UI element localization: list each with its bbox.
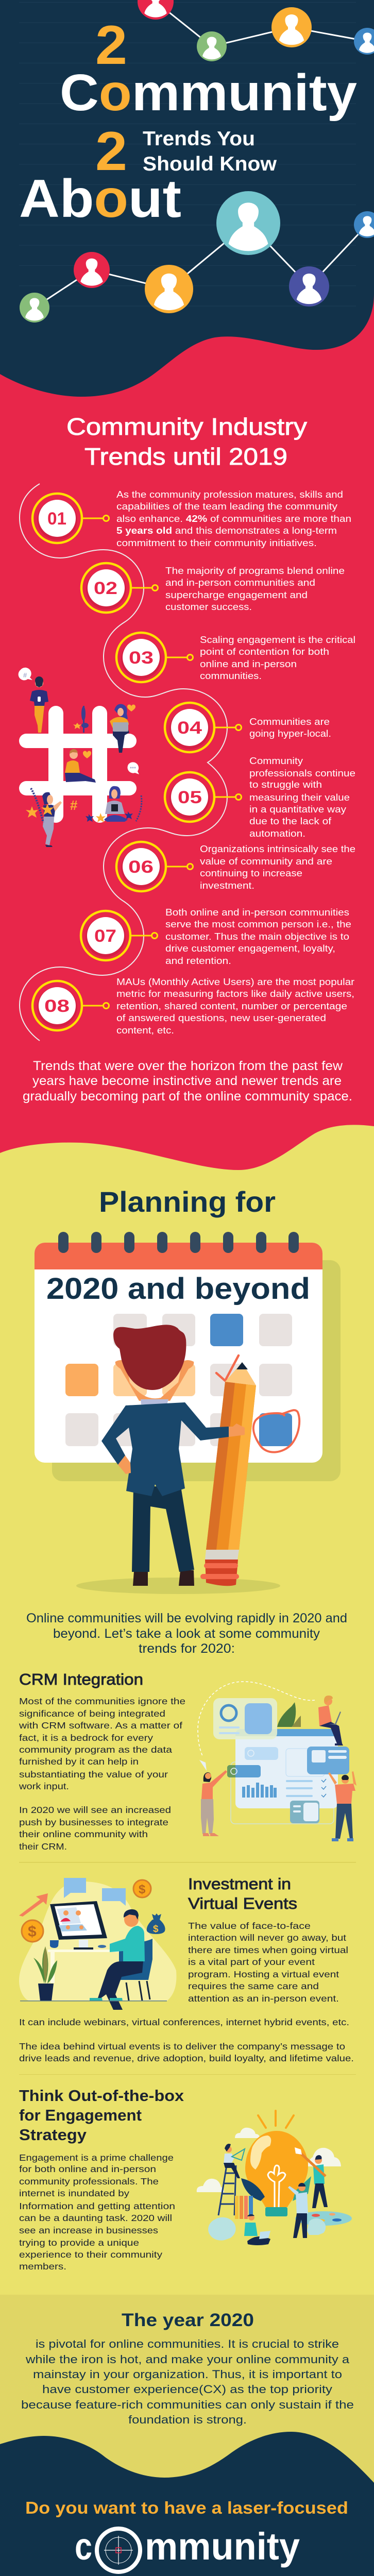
calendar xyxy=(35,1232,341,1481)
title xyxy=(19,14,357,229)
person: man with heart xyxy=(65,749,96,783)
engagement text: Engagement is a prime challenge xyxy=(19,2153,174,2163)
timeline path xyxy=(20,484,227,1041)
calendar heading: 2020 and beyond xyxy=(46,1272,310,1306)
trend 05: to struggle with xyxy=(249,779,322,790)
plant and cup xyxy=(33,1940,59,2001)
virtual events text: is a vital part of your event xyxy=(188,1957,315,1967)
trend 07: and retention. xyxy=(165,956,231,966)
heading: the year 2020: The year 2020 xyxy=(122,2310,254,2330)
closing paragraph of trends: Trends that were over the horizon from the past few xyxy=(33,1059,343,1073)
darker yellow band xyxy=(0,2295,374,2501)
neck and ears xyxy=(115,1360,194,1401)
CRM text: substantiating the value of your xyxy=(19,1769,168,1780)
trend 06: 06 xyxy=(128,857,154,877)
title: Trends You xyxy=(143,128,255,150)
trend 08: content, etc. xyxy=(116,1025,174,1036)
person: standing woman xyxy=(26,788,62,847)
icon: teal user xyxy=(216,191,280,255)
person: man standing xyxy=(288,2183,308,2238)
network graphic: top xyxy=(138,0,374,61)
ground shadow xyxy=(76,1578,280,1594)
pencil xyxy=(200,1362,256,1586)
trend 07: Both online and in-person communities xyxy=(165,907,349,918)
heading: planning for: Planning for xyxy=(99,1185,276,1218)
bulb xyxy=(245,2131,308,2207)
person: seated man xyxy=(244,2214,270,2245)
trend 08: 08 xyxy=(44,996,70,1016)
CRM text xyxy=(19,1696,185,1852)
closing paragraph of trends: gradually becoming part of the online community space. xyxy=(23,1089,352,1104)
collar xyxy=(141,1399,168,1404)
intro paragraph xyxy=(26,1611,347,1656)
virtual events wide text: drive leads and revenue, drive adoption, build loyalty, and lifetime value. xyxy=(19,2053,354,2063)
title: Should Know xyxy=(143,153,277,175)
trend 06: investment. xyxy=(200,880,254,891)
person: meditating woman xyxy=(86,786,142,822)
trend 06: continuing to increase xyxy=(200,868,302,878)
icon: orange hash: # xyxy=(70,798,78,813)
trend 06: Organizations intrinsically see the xyxy=(200,844,355,854)
closing paragraph of trends: years have become instinctive and newer trends are xyxy=(32,1074,342,1088)
virtual events text: The value of face-to-face xyxy=(188,1921,311,1931)
CRM text: fact, it is a bedrock for every xyxy=(19,1733,153,1743)
money bag xyxy=(147,1913,165,1935)
year 2020 paragraph: because feature-rich communities can only sustain if the xyxy=(21,2398,354,2411)
CRM text: In 2020 we will see an increased xyxy=(19,1805,171,1815)
trend 04 xyxy=(165,703,331,752)
pencils xyxy=(235,2196,253,2219)
trend 02 xyxy=(81,563,345,613)
intro paragraph: beyond. Let’s take a look at some community xyxy=(53,1626,320,1641)
virtual events wide text: The idea behind virtual events is to deliver the company’s message to xyxy=(19,2041,345,2052)
virtual events text: interaction will never go away, but xyxy=(188,1933,346,1943)
icon: blue user xyxy=(354,211,374,238)
icon: check mark xyxy=(216,1355,239,1381)
engagement text: members. xyxy=(19,2261,66,2272)
monitor with video call xyxy=(50,1901,107,1950)
trend 08: retention, shared content, number or percentage xyxy=(116,1001,347,1011)
heading: think out of the box xyxy=(19,2087,184,2144)
CRM text: community program as the data xyxy=(19,1744,172,1755)
heading: think out of the box: Think Out-of-the-box xyxy=(19,2087,184,2105)
leaves xyxy=(241,2178,265,2201)
virtual events text: program. Hosting a virtual event xyxy=(188,1969,339,1979)
calendar page xyxy=(35,1243,322,1463)
trend 06 xyxy=(116,842,355,891)
virtual events wide text: It can include webinars, virtual conferences, internet hybrid events, etc. xyxy=(19,2017,349,2027)
trend 05 xyxy=(165,756,355,839)
trend 05: 05 xyxy=(178,788,202,807)
trend 08: of answered questions, new user-generated xyxy=(116,1013,326,1023)
icon: orange user xyxy=(145,265,193,313)
CRM text: with CRM software. As a matter of xyxy=(19,1720,182,1731)
coins: $ xyxy=(139,1883,146,1896)
title: Community xyxy=(60,64,357,122)
trend 02: and in-person communities and xyxy=(165,578,315,588)
virtual events text: there are times when going virtual xyxy=(188,1945,348,1955)
coins: $ xyxy=(28,1923,37,1940)
trend 02: 02 xyxy=(94,579,117,598)
CRM text: significance of being integrated xyxy=(19,1708,165,1719)
person: man on laptop xyxy=(318,1696,343,1745)
trend 05: measuring their value xyxy=(249,792,350,803)
CRM text: their online community with xyxy=(19,1829,148,1839)
shoes xyxy=(133,1570,194,1586)
trend 02: The majority of programs blend online xyxy=(165,566,345,576)
year 2020 paragraph: is pivotal for online communities. It is crucial to strike xyxy=(36,2337,339,2350)
year 2020 paragraph: foundation is strong. xyxy=(128,2413,247,2426)
heading: community industry trends xyxy=(66,413,307,470)
community logotype with target: c xyxy=(75,2525,92,2568)
trend 03: Scaling engagement is the critical xyxy=(200,635,355,645)
calendar shadow xyxy=(52,1260,341,1481)
trend 08: MAUs (Monthly Active Users) are the most popular xyxy=(116,977,354,987)
person: man at desk xyxy=(90,1909,152,2010)
engagement text: see an increase in businesses xyxy=(19,2225,158,2235)
paint palette xyxy=(295,2211,352,2226)
jacket xyxy=(101,1402,229,1496)
trend 05: automation. xyxy=(249,828,305,839)
intro paragraph: Online communities will be evolving rapidly in 2020 and xyxy=(26,1611,347,1625)
virtual events text xyxy=(188,1921,348,2004)
speech bubble xyxy=(127,762,139,774)
title: 2 xyxy=(95,120,127,182)
coins xyxy=(22,1880,151,1942)
trend 01: capabilities of the team leading the community xyxy=(116,501,337,512)
heading: community industry trends: Trends until 2019 xyxy=(84,443,287,470)
call to action heading xyxy=(25,2498,348,2576)
rays xyxy=(258,2111,294,2128)
trend 07: drive customer engagement, loyalty, xyxy=(165,943,335,954)
engagement text: for both online and in-person xyxy=(19,2164,156,2174)
icon: circled date xyxy=(253,1410,299,1452)
icon: orange user xyxy=(271,7,312,47)
engagement text: Information and getting attention xyxy=(19,2201,175,2211)
trend 04: going hyper-local. xyxy=(249,728,331,739)
yellow section background xyxy=(0,1125,374,2318)
trend 03: online and in-person xyxy=(200,659,297,669)
trend 05: professionals continue xyxy=(249,768,355,778)
icon: green user xyxy=(197,31,227,61)
trend 05: due to the lack of xyxy=(249,816,332,826)
heading: investment in virtual events xyxy=(188,1875,297,1912)
trend 07: 07 xyxy=(94,926,116,946)
person: man with phone xyxy=(19,668,48,733)
title: 2 xyxy=(95,14,127,76)
hands xyxy=(118,1423,245,1474)
arrow xyxy=(19,1893,48,1917)
divider xyxy=(19,1862,356,1863)
trend 04: Communities are xyxy=(249,717,330,727)
heading: think out of the box: Strategy xyxy=(19,2126,87,2144)
trend 07: serve the most common person i.e., the xyxy=(165,919,351,929)
virtual events text: requires the same care and xyxy=(188,1981,319,1991)
small bulbs xyxy=(208,2217,326,2241)
heading: think out of the box: for Engagement xyxy=(19,2106,142,2124)
trend 03 xyxy=(116,633,355,682)
engagement text: internet is inundated by xyxy=(19,2188,129,2198)
network graphic: bottom xyxy=(20,191,374,323)
plant on hash xyxy=(73,706,89,733)
trend 05: Community xyxy=(249,756,303,766)
icon: green user xyxy=(20,293,49,323)
trend 08: metric for measuring factors like daily active users, xyxy=(116,989,354,999)
calendar rings xyxy=(58,1232,299,1253)
trend 07: customer. Thus the main objective is to xyxy=(165,931,349,942)
trend 06: value of community and are xyxy=(200,856,332,867)
CRM illustration xyxy=(198,1682,356,1841)
trend 01: As the community profession matures, skills and xyxy=(116,489,343,500)
engagement text xyxy=(19,2153,175,2272)
closing paragraph of trends xyxy=(23,1059,352,1104)
icon: indigo user xyxy=(289,266,329,307)
desk xyxy=(48,1950,123,1952)
hash symbol xyxy=(19,706,137,823)
heading: community industry trends: Community Industry xyxy=(66,413,307,440)
trend 02: customer success. xyxy=(165,602,252,612)
CRM text: push by businesses to integrate xyxy=(19,1817,168,1827)
engagement text: trying to provide a unique xyxy=(19,2238,139,2248)
divider xyxy=(19,2074,356,2075)
CRM text: Most of the communities ignore the xyxy=(19,1696,185,1706)
icon: red user xyxy=(74,252,110,288)
trend 01: 5 years old and this demonstrates a long-term xyxy=(116,526,337,536)
trend 01: also enhance. 42% of communities are more than xyxy=(116,514,351,524)
engagement text: experience to their community xyxy=(19,2249,162,2260)
person: man with brush xyxy=(295,2147,328,2208)
engagement text: can be a daunting task. 2020 will xyxy=(19,2213,172,2223)
year 2020 paragraph: mainstay in your organization. Thus, it is important to xyxy=(33,2368,342,2381)
heading: investment in virtual events: Investment in xyxy=(188,1875,291,1893)
year 2020 paragraph: while the iron is hot, and make your online community a xyxy=(25,2353,350,2366)
person: woman on ladder xyxy=(224,2144,245,2178)
call to action heading: Do you want to have a laser-focused xyxy=(25,2498,348,2517)
trend 02: supercharge engagement and xyxy=(165,590,308,600)
trend 08 xyxy=(32,977,354,1036)
CRM text: work input. xyxy=(19,1781,69,1791)
icon: blue user xyxy=(354,28,374,55)
trend 01: 01 xyxy=(47,509,66,529)
hair xyxy=(113,1325,186,1390)
hashtag illustration xyxy=(19,668,142,847)
engagement text: community professionals. The xyxy=(19,2176,159,2187)
year 2020 paragraph: have customer experience(CX) as the top priority xyxy=(42,2383,332,2396)
clouds xyxy=(197,2128,341,2192)
trend 03: 03 xyxy=(129,648,154,668)
man with giant pencil xyxy=(101,1325,256,1586)
calendar day cells xyxy=(65,1314,292,1446)
trend 05: in a quantitative way xyxy=(249,804,346,815)
community logotype with target: mmunity xyxy=(145,2525,300,2568)
trend 03: communities. xyxy=(200,671,262,681)
person: woman pointing xyxy=(201,1770,227,1836)
person: woman with laptop xyxy=(110,704,135,753)
intro paragraph: trends for 2020: xyxy=(139,1641,235,1656)
trend 04: 04 xyxy=(177,718,202,738)
red section background xyxy=(0,294,374,1236)
person: man with phone: # xyxy=(23,671,27,679)
CRM text: furnished by it can help in xyxy=(19,1756,139,1767)
light bulb illustration xyxy=(197,2111,352,2245)
chat bubbles xyxy=(64,1878,86,1898)
trend 01 xyxy=(32,489,351,548)
person: man reaching up xyxy=(328,1771,356,1841)
heading: investment in virtual events: Virtual Events xyxy=(188,1894,297,1912)
navy call-to-action background xyxy=(0,2432,374,2576)
CRM text: their CRM. xyxy=(19,1841,67,1852)
icon: red user xyxy=(138,0,174,20)
community logotype with target xyxy=(75,2525,300,2572)
ladder xyxy=(218,2165,236,2215)
trousers xyxy=(132,1486,194,1572)
year 2020 paragraph xyxy=(21,2337,354,2426)
virtual events wide text xyxy=(19,2017,354,2063)
trend 07 xyxy=(81,907,351,966)
title: About xyxy=(19,169,181,229)
trend 03: point of contention for both xyxy=(200,647,329,657)
money bag: $ xyxy=(153,1924,159,1935)
virtual events illustration xyxy=(19,1878,176,2010)
trend 01: commitment to their community initiatives. xyxy=(116,538,317,548)
virtual events text: attention as an in-person event. xyxy=(188,1993,339,2004)
heading: CRM integration: CRM Integration xyxy=(19,1670,143,1688)
